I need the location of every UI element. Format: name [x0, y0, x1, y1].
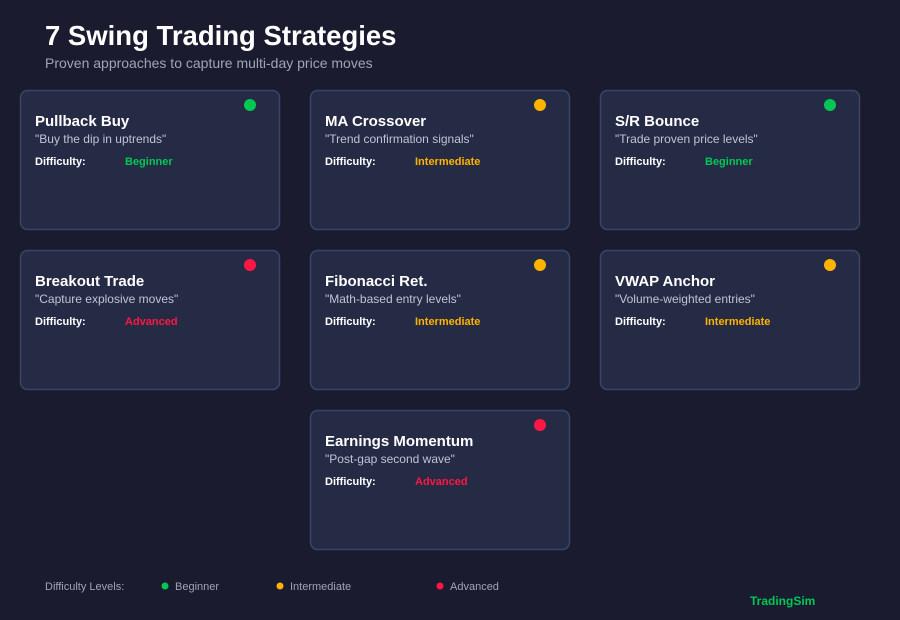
panel: S/R Bounce	[600, 90, 860, 230]
panel: Fibonacci Ret.: Difficulty:	[325, 316, 376, 328]
panel: MA Crossover: MA Crossover	[325, 113, 426, 130]
panel: Pullback Buy: Beginner	[125, 156, 173, 168]
panel: Breakout Trade: Difficulty:	[35, 316, 86, 328]
panel: Pullback Buy	[20, 90, 280, 230]
panel: Fibonacci Ret.: Intermediate	[415, 316, 480, 328]
panel: Earnings Momentum: Earnings Momentum	[325, 433, 473, 450]
panel: VWAP Anchor: "Volume-weighted entries"	[615, 292, 755, 306]
legend: Intermediate	[290, 581, 351, 593]
panel: Breakout Trade: "Capture explosive moves"	[35, 292, 178, 306]
panel: MA Crossover: "Trend confirmation signals"	[325, 132, 474, 146]
panel: Fibonacci Ret.: "Math-based entry levels"	[325, 292, 461, 306]
panel: MA Crossover: Difficulty:	[325, 156, 376, 168]
title: 7 Swing Trading Strategies	[45, 20, 396, 51]
legend: Difficulty Levels:	[45, 581, 124, 593]
panel: Fibonacci Ret.: Fibonacci Ret.	[325, 273, 428, 290]
legend: Advanced	[450, 581, 499, 593]
panel: S/R Bounce: Beginner	[705, 156, 753, 168]
legend	[45, 581, 499, 593]
panel: Earnings Momentum	[310, 410, 570, 550]
panel: Breakout Trade	[20, 250, 280, 390]
panel: Earnings Momentum: Advanced	[415, 476, 468, 488]
panel: Pullback Buy: Pullback Buy	[35, 113, 130, 130]
panel: VWAP Anchor: VWAP Anchor	[615, 273, 715, 290]
subtitle: Proven approaches to capture multi-day price moves	[45, 55, 373, 71]
panel: Breakout Trade: Advanced	[125, 316, 178, 328]
panel: Breakout Trade: Breakout Trade	[35, 273, 144, 290]
panel: Fibonacci Ret.	[310, 250, 570, 390]
panel: Pullback Buy: Difficulty:	[35, 156, 86, 168]
panel: S/R Bounce: Difficulty:	[615, 156, 666, 168]
brand: TradingSim	[750, 594, 815, 608]
panel: Earnings Momentum: "Post-gap second wave"	[325, 452, 455, 466]
panel: VWAP Anchor	[600, 250, 860, 390]
panel: S/R Bounce: "Trade proven price levels"	[615, 132, 758, 146]
panel: S/R Bounce: S/R Bounce	[615, 113, 699, 130]
panel: MA Crossover: Intermediate	[415, 156, 480, 168]
panel: Pullback Buy: "Buy the dip in uptrends"	[35, 132, 166, 146]
panel: VWAP Anchor: Difficulty:	[615, 316, 666, 328]
panel: VWAP Anchor: Intermediate	[705, 316, 770, 328]
legend: Beginner	[175, 581, 219, 593]
panel: MA Crossover	[310, 90, 570, 230]
panel: Earnings Momentum: Difficulty:	[325, 476, 376, 488]
